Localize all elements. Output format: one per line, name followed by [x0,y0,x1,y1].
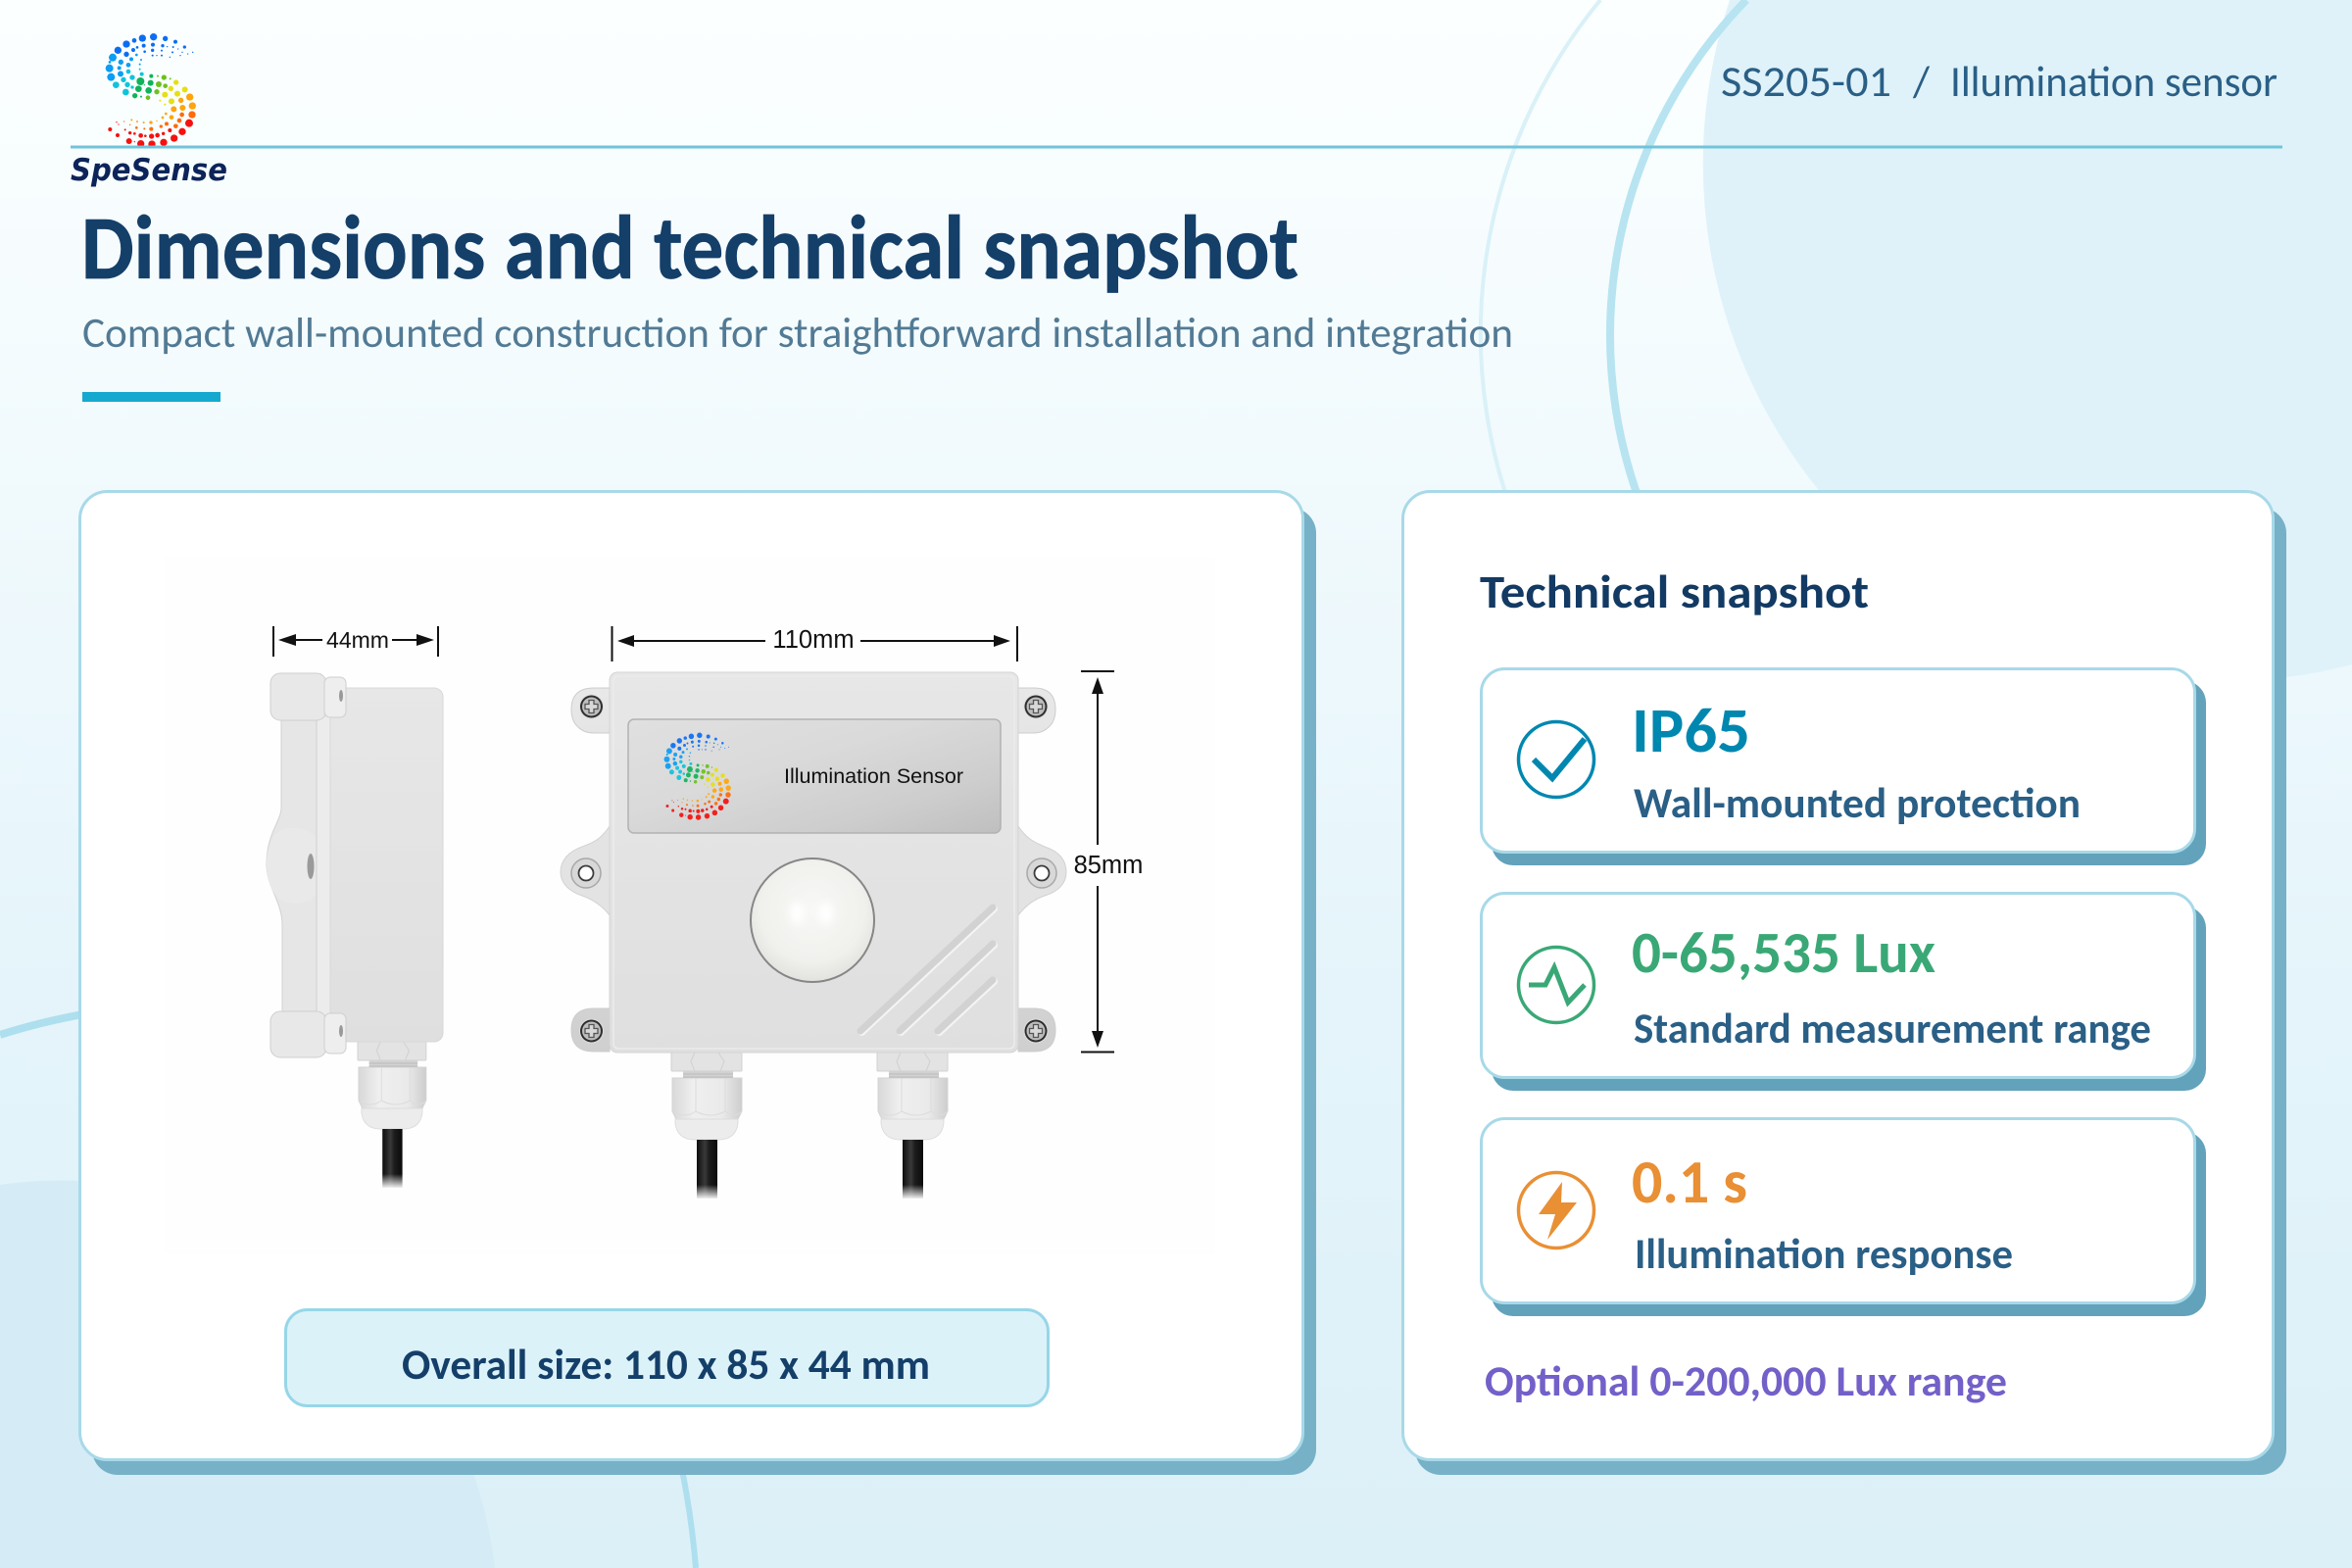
size callout: Overall size: 110 x 85 x 44 mm [402,1338,930,1391]
spec card: range [1482,894,2206,1091]
nameplate: Illumination Sensor [784,765,963,788]
front view dimension: 85mm: 85mm [1074,852,1143,879]
header rule [71,145,2282,149]
header product label: SS205-01 [1721,55,1891,108]
light sensor dome [751,858,874,982]
optional range note: Optional 0-200,000 Lux range [1485,1355,2007,1407]
spec card: IP65: IP65 [1632,692,1750,769]
spec card: response: Illumination response [1635,1228,2013,1280]
nameplate [628,719,1001,833]
panel heading: Technical snapshot [1480,563,1869,620]
panel: dimensions [80,492,1316,1475]
side view dimension: 44mm: 44mm [326,627,389,653]
icon: check [1519,721,1593,798]
front view dimension: 110mm [612,626,1017,662]
spec card: range: Standard measurement range [1634,1003,2151,1054]
device side view [267,673,443,1189]
spec card: IP65: Wall-mounted protection [1634,777,2081,829]
icon: waveform [1519,947,1593,1023]
logo [71,33,227,188]
accent bar [82,392,220,402]
front view dimension: 85mm [1074,671,1143,1053]
side view dimension: 44mm [273,626,438,657]
subtitle: Compact wall-mounted construction for straightforward installation and integration [82,307,1513,359]
spec card: response: 0.1 s [1632,1144,1747,1219]
title: Dimensions and technical snapshot [81,192,1298,303]
spec card: IP65 [1482,668,2206,865]
spec card: range: 0-65,535 Lux [1632,917,1936,989]
size callout [286,1309,1049,1405]
header product label: Illumination sensor [1950,55,2278,108]
header product label [1721,55,2278,108]
vent grooves [860,907,994,1033]
header product label: / [1912,55,1931,108]
spec card: response [1482,1119,2206,1316]
logo: SpeSense [71,153,227,188]
device front view [561,672,1066,1200]
panel: technical snapshot [1403,492,2286,1475]
icon: lightning [1519,1172,1593,1249]
front view dimension: 110mm: 110mm [772,626,855,654]
